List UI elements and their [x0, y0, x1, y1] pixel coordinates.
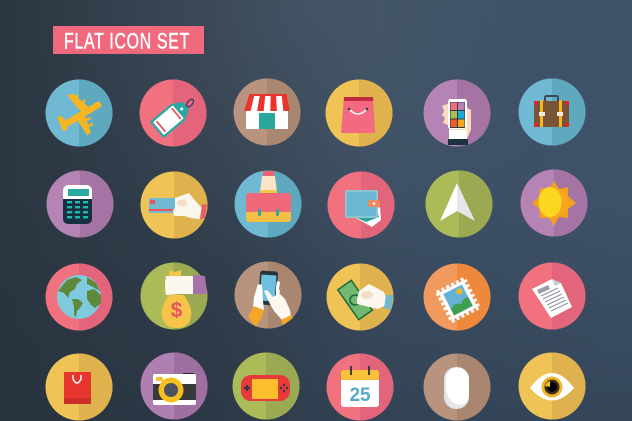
icon: hand holding money bag	[140, 262, 208, 330]
icon: wallet	[328, 172, 394, 238]
icon: calendar: 25	[349, 385, 371, 406]
icon: storefront	[234, 78, 300, 146]
icon: picture stamp	[424, 264, 490, 330]
icon: suitcase	[518, 78, 586, 146]
icon: hands using smartphone	[234, 262, 302, 328]
icon: handheld game console	[232, 352, 300, 420]
icon: hand holding briefcase	[234, 170, 302, 238]
icon: globe	[46, 264, 112, 330]
icon: navigation arrow	[426, 170, 492, 238]
icon: hand with credit card	[140, 172, 208, 238]
icon: eye	[518, 352, 586, 420]
icon: camera	[140, 352, 208, 420]
icon: hand holding money bag: $	[171, 299, 183, 322]
icon: airplane	[46, 80, 112, 146]
icon: sun	[520, 170, 588, 236]
icon: calendar	[326, 354, 394, 420]
icon: red gift bag	[46, 354, 112, 420]
title banner: FLAT ICON SET	[64, 30, 190, 54]
icon: hand with banknote	[326, 264, 394, 330]
icon: hand holding smartphone	[424, 80, 490, 146]
icon: price tag	[140, 80, 206, 146]
icon: shopping bag	[326, 80, 392, 146]
icon: calculator	[46, 170, 114, 238]
icon: computer mouse	[424, 354, 490, 420]
icon: document	[518, 262, 586, 330]
